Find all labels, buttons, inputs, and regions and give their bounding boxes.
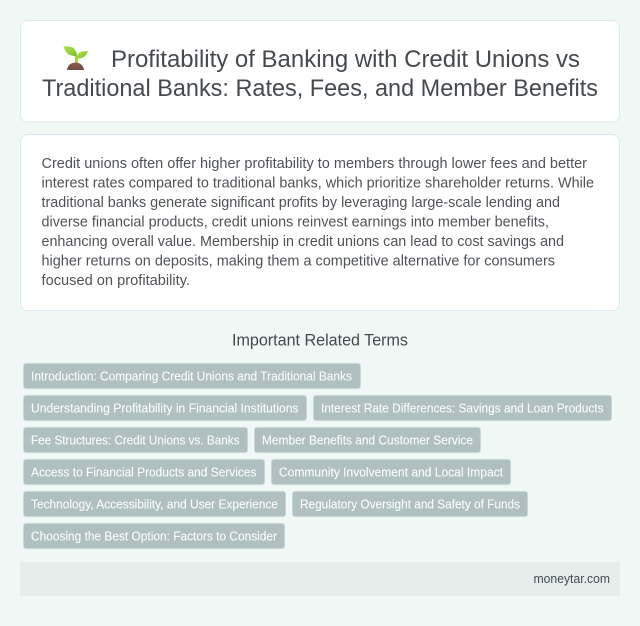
tag: access to products: Access to Financial Products and Services — [31, 464, 256, 480]
tag: member benefits: Member Benefits and Customer Service — [262, 432, 473, 448]
tag: introduction — [24, 364, 360, 388]
panel: title card — [20, 20, 620, 122]
panel: related terms tags — [24, 364, 612, 548]
text block: summary: enhancing overall value. Membership in credit unions can lead to cost savings and — [42, 234, 564, 250]
text block: summary: diverse financial products, credit unions reinvest earnings into member benefits, — [42, 214, 549, 230]
tag: technology — [24, 492, 286, 516]
tag: understanding profitability: Understanding Profitability in Financial Institutions — [31, 400, 298, 416]
tag: fee structures: Fee Structures: Credit Unions vs. Banks — [31, 432, 240, 448]
tag: fee structures — [24, 428, 248, 452]
text block: summary: focused on profitability. — [42, 273, 190, 289]
icon: seedling — [64, 46, 88, 70]
heading: Important Related Terms: Important Related Terms — [232, 332, 408, 350]
tag: interest rate differences: Interest Rate Differences: Savings and Loan Products — [321, 400, 604, 416]
heading: title: Traditional Banks: Rates, Fees, and Member Benefits — [42, 75, 598, 102]
text block: summary: Credit unions often offer higher profitability to members through lower fees and better — [42, 156, 587, 172]
tag: member benefits — [254, 428, 480, 452]
tag: regulatory oversight — [292, 492, 528, 516]
text block: summary — [42, 156, 594, 289]
tag: regulatory oversight: Regulatory Oversight and Safety of Funds — [300, 496, 520, 512]
tag: understanding profitability — [24, 396, 306, 420]
tag: interest rate differences — [314, 396, 612, 420]
text block: summary: traditional banks generate significant profits by leveraging large-scale lending and — [42, 195, 560, 211]
heading: title — [42, 46, 598, 102]
tag: community involvement: Community Involvement and Local Impact — [279, 464, 503, 480]
tag: choosing the best option: Choosing the Best Option: Factors to Consider — [31, 528, 278, 544]
tag: technology: Technology, Accessibility, and User Experience — [31, 496, 278, 512]
text: source: moneytar.com — [534, 571, 610, 586]
panel: footer — [20, 562, 620, 596]
tag: access to products — [24, 460, 264, 484]
text block: summary: interest rates compared to traditional banks, which prioritize shareholder returns. While — [42, 176, 594, 192]
tag: choosing the best option — [24, 524, 284, 548]
tag: community involvement — [272, 460, 510, 484]
heading: title: Profitability of Banking with Credit Unions vs — [111, 46, 580, 73]
tag: introduction: Introduction: Comparing Credit Unions and Traditional Banks — [31, 368, 352, 384]
text block: summary: higher returns on deposits, making them a competitive alternative for consumers — [42, 254, 555, 270]
panel: summary card — [20, 134, 620, 310]
